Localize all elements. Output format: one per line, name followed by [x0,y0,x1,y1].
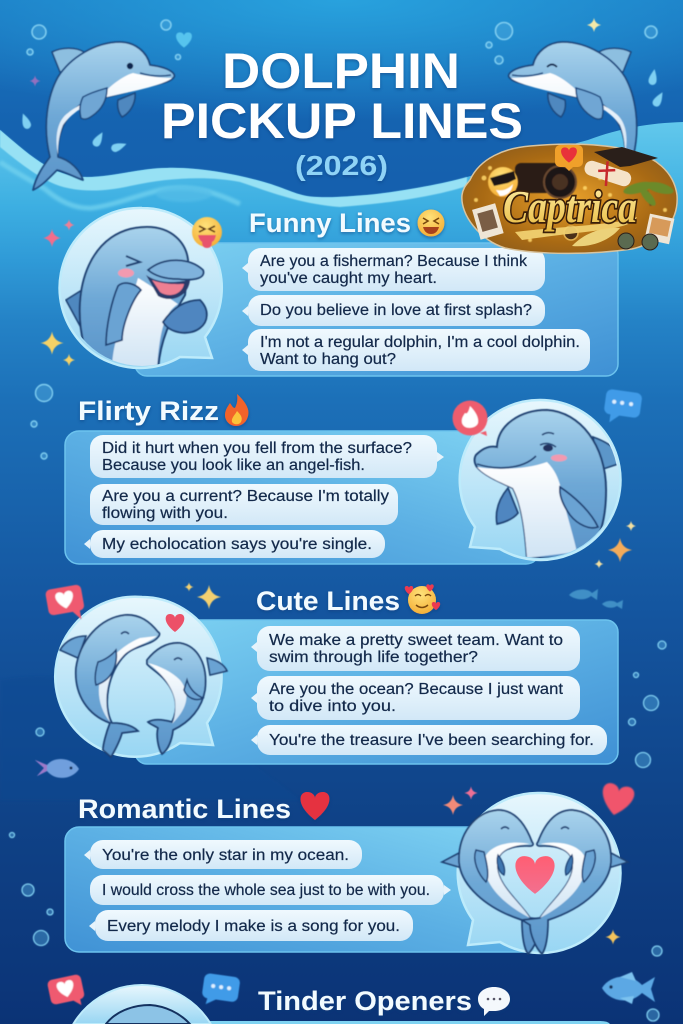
chat bubble [84,530,385,558]
logo heart chat [555,145,583,171]
dolphin left [442,810,548,954]
heading: cute lines: Cute Lines [256,586,400,616]
chat bubble: I'm not a regular dolphin, I'm a cool dolphin. [260,334,580,351]
speech circle [458,793,620,953]
bubbles left [31,384,52,459]
top glow [0,0,683,160]
logo: Captrica badge [462,144,677,253]
icon: small heart [166,614,184,632]
emoji: tongue out [192,217,222,248]
chat bubble: You're the only star in my ocean. [102,847,349,864]
chat bubble [251,676,580,720]
panel card [65,827,540,952]
dolphin right [147,643,227,754]
fish: purple [35,759,79,778]
chat bubble [84,840,362,869]
dolphin: leaping left [33,42,174,190]
speech circle [55,597,222,757]
wave band [0,122,683,400]
icon: blue chat [201,973,241,1008]
chat bubble: Are you a fisherman? Because I think [260,253,527,270]
decorative marks top [19,18,666,153]
panel: funny lines [60,208,618,376]
stars near cute panel [184,582,221,609]
logo photos [472,203,674,244]
logo sunglasses emoji [488,167,518,197]
panel card [135,243,618,376]
chat bubble: I would cross the whole sea just to be with you. [102,882,430,899]
icon: red heart [598,782,636,818]
chat bubble [242,248,545,291]
chat bubble: Did it hurt when you fell from the surface? [102,440,412,457]
decorative bubbles top [27,20,657,64]
logo feather [572,228,620,246]
dolphin left [60,615,160,757]
logo sparkles [474,166,667,242]
bottom shadow hill [0,676,300,800]
panel: cute lines [55,597,618,764]
chat bubble: to dive into you. [269,698,396,715]
chat bubble: Are you the ocean? Because I just want [269,681,564,698]
heading: funny lines: Funny Lines [249,208,411,238]
chat bubble [251,626,580,671]
chat bubble: We make a pretty sweet team. Want to [269,632,563,649]
chat bubble [242,329,590,371]
logo diploma [581,155,634,193]
logo camera [515,163,576,198]
panel: tinder openers [73,985,610,1024]
title: (2026) [295,150,388,181]
dolphin: tinder [106,1005,190,1024]
logo graduation cap [594,147,658,167]
chat bubble: flowing with you. [102,505,228,522]
chat bubble [90,875,451,905]
title: PICKUP LINES [161,93,523,149]
logo swoosh [515,217,637,240]
stars near romantic panel [443,786,620,944]
badge: fire [452,400,488,436]
fish: blue [602,972,655,1004]
chat bubble: Every melody I make is a song for you. [107,918,400,935]
chat bubble: Do you believe in love at first splash? [260,302,532,319]
icon: blue chat [602,389,643,426]
icon: pink heart chat [47,974,86,1011]
dolphin: laughing [66,227,207,370]
speech circle [460,400,620,560]
chat bubble: You're the treasure I've been searching for. [269,732,594,749]
panel card [65,431,540,564]
speech circle [60,208,222,368]
chat bubble [89,910,413,941]
heading: flirty rizz: Flirty Rizz [78,396,219,426]
chat bubble: swim through life together? [269,649,478,666]
title [161,43,523,181]
chat bubble: My echolocation says you're single. [102,536,372,553]
chat bubble: Are you a current? Because I'm totally [102,488,389,505]
icon: pink heart chat [45,584,86,625]
dolphin right [522,810,628,954]
tiny fish [569,589,623,609]
panel card [135,620,618,764]
icon: big heart [515,856,555,894]
panel: flirty rizz [65,400,624,564]
chat bubble [251,725,607,755]
logo blob [462,144,677,253]
bubbles right [10,641,666,1021]
dolphins: pair [60,615,227,757]
logo sunglasses [618,233,658,250]
logo aperture [564,226,578,240]
chat bubble [90,435,444,478]
chat bubble: Want to hang out? [260,351,396,368]
logo wordmark: Captrica [503,181,637,232]
speech circle [73,985,211,1024]
chat bubble [90,484,398,525]
dolphin: flirty [475,410,624,558]
chat bubble [242,295,545,326]
chat bubble: you've caught my heart. [260,270,437,287]
title: DOLPHIN [222,43,460,99]
panel card [205,1021,610,1024]
chat bubble: Because you look like an angel-fish. [102,457,365,474]
logo palm [622,179,675,208]
panel: romantic lines [65,793,628,954]
stars right of flirty panel [594,521,636,568]
dolphins: heart [442,810,628,954]
stars left of funny panel [40,220,75,366]
heading: tinder openers: Tinder Openers [258,986,472,1016]
dolphin: leaping right [509,42,650,190]
heading: romantic lines: Romantic Lines [78,794,291,824]
